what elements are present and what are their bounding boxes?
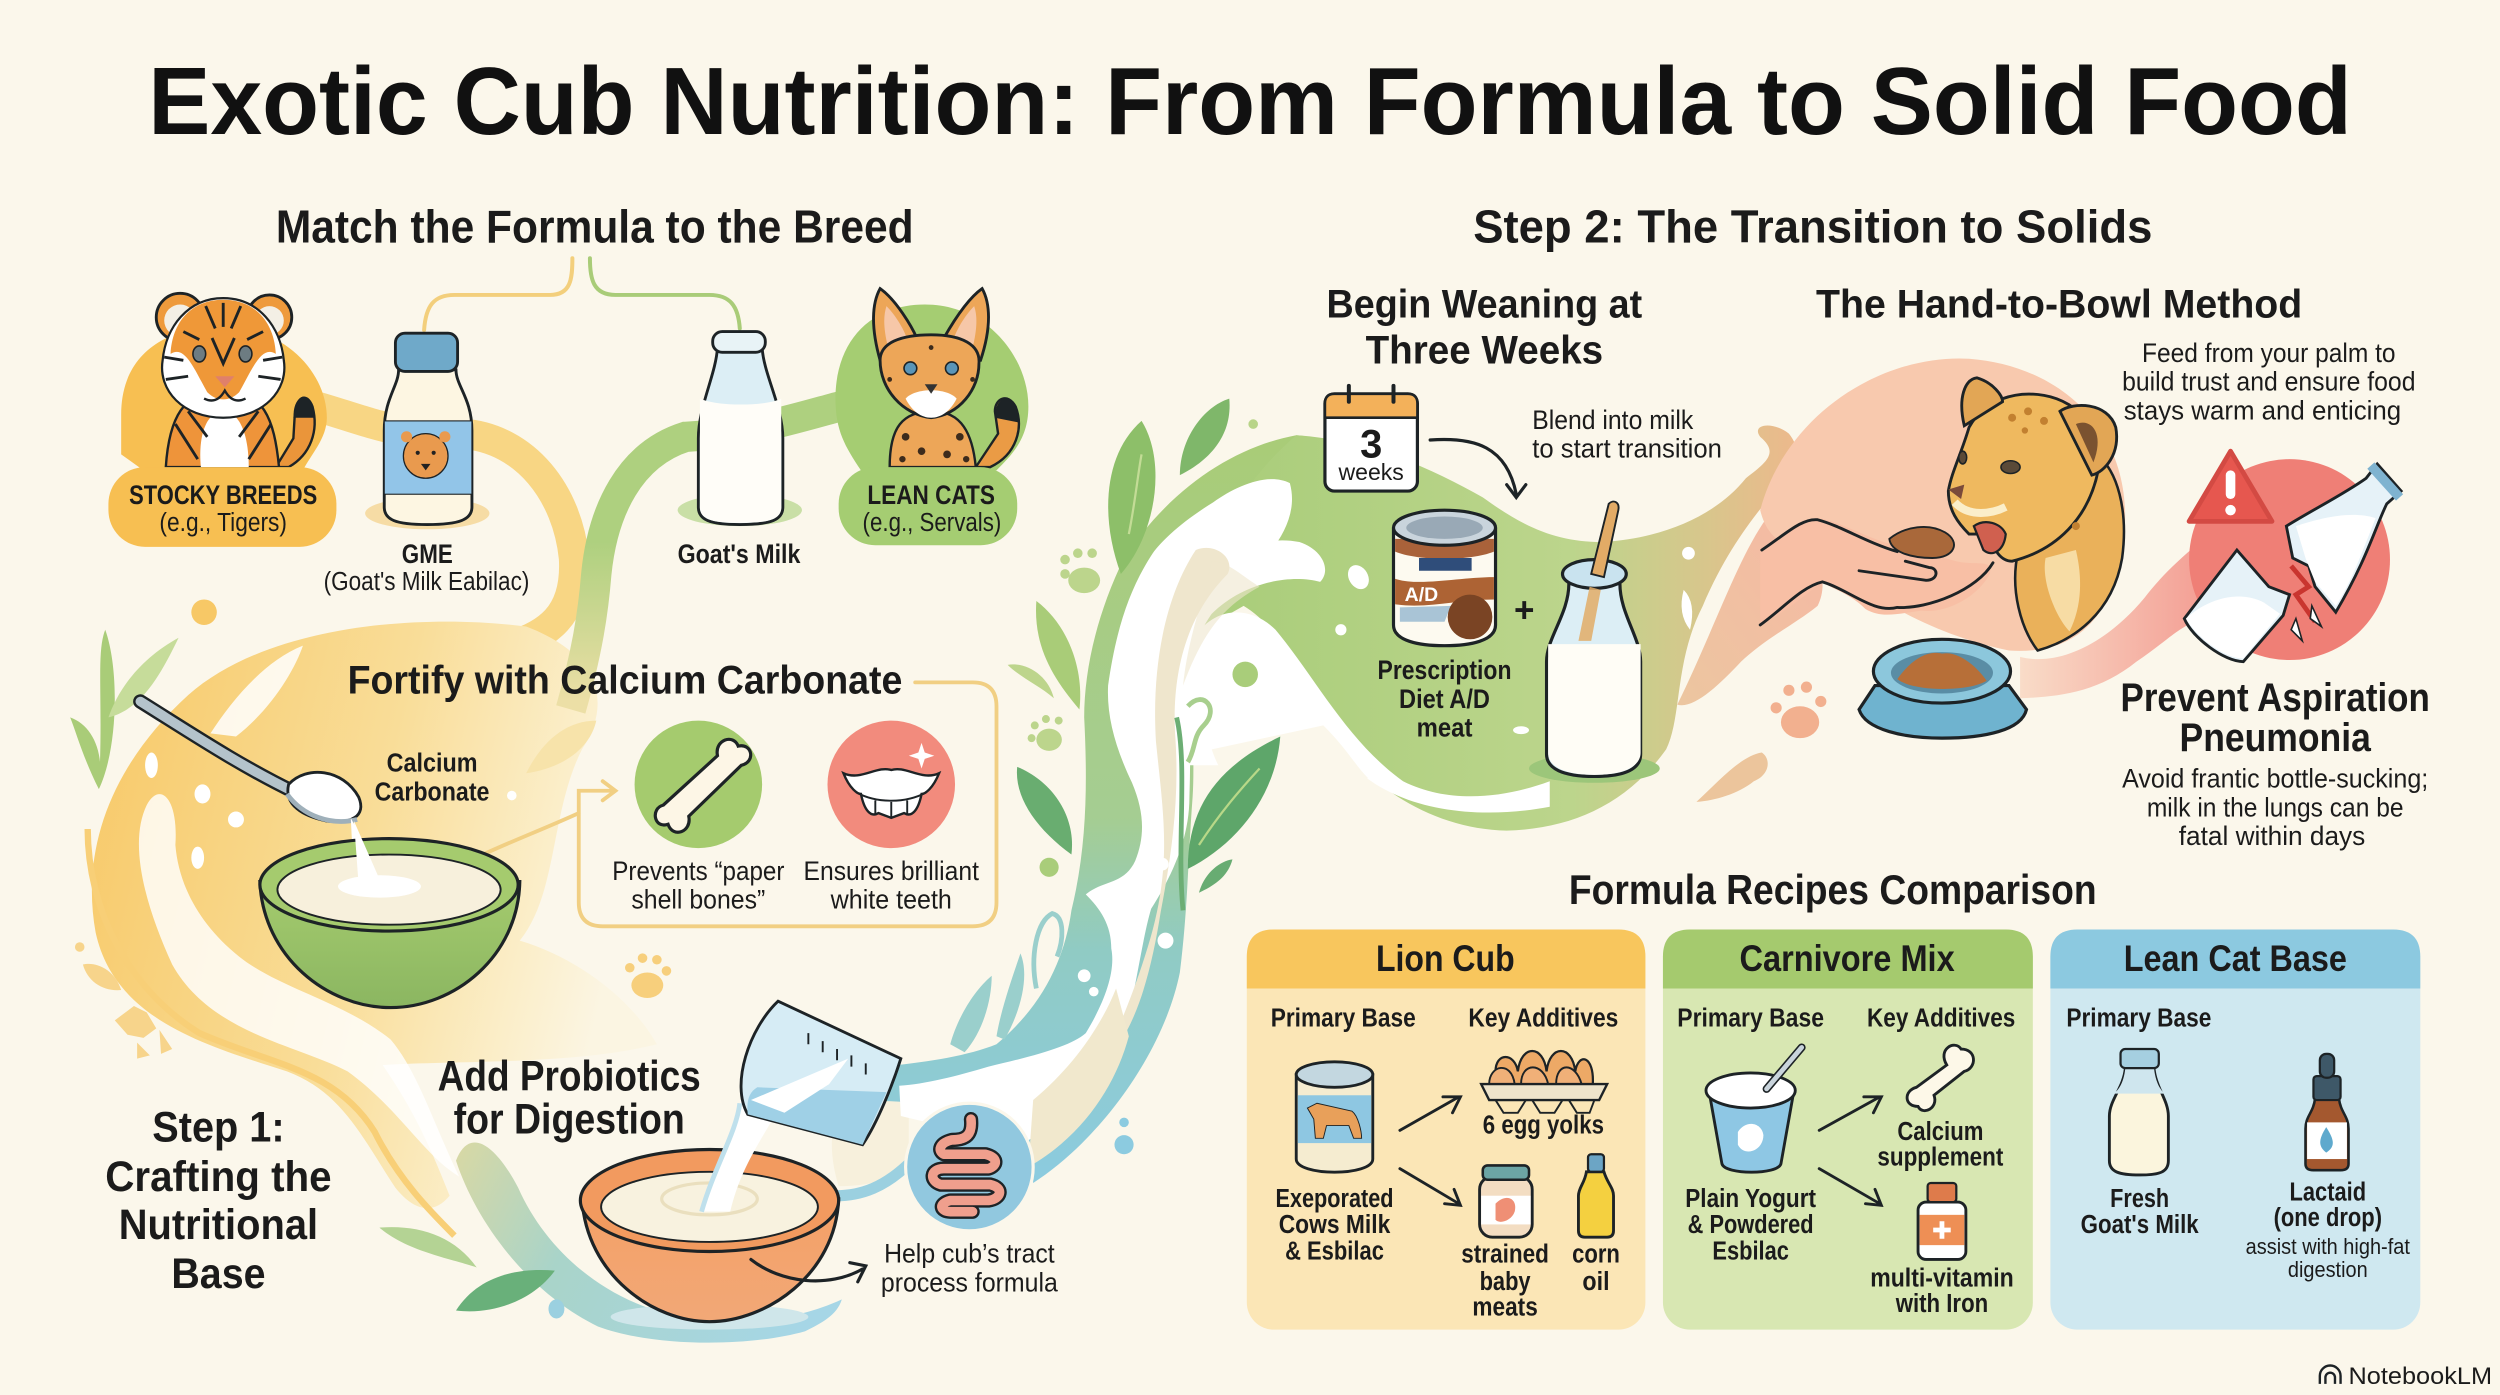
heading: fortify: Fortify with Calcium Carbonate <box>348 659 902 703</box>
panel: lion cub <box>1247 929 1645 1330</box>
flow ribbon: green from lean cats <box>571 405 845 709</box>
icon: blue food bowl <box>1859 639 2026 738</box>
heading: hand to bowl: The Hand-to-Bowl Method <box>1816 282 2302 326</box>
text: lactaid <box>2246 1176 2411 1282</box>
heading: add probiotics: for Digestion <box>454 1096 685 1144</box>
text: white teeth: white teeth <box>830 884 952 915</box>
flow: blue lower ribbon around probiotics bowl <box>456 1142 842 1343</box>
icon: A/D can: A/D <box>1405 585 1438 606</box>
heading: begin weaning <box>1327 282 1642 372</box>
text: paper shell bones: shell bones” <box>631 884 765 915</box>
icon: evaporated milk can <box>1296 1062 1373 1172</box>
panel: peach circle <box>1760 358 2125 651</box>
watermark: NotebookLM: NotebookLM <box>2349 1363 2492 1390</box>
text: avoid frantic <box>2122 763 2428 851</box>
panel: stocky breeds tiger <box>108 293 336 547</box>
text: fresh goat milk: Fresh <box>2110 1183 2169 1213</box>
label: lean cats <box>863 479 1001 537</box>
text: multi-vitamin: multi-vitamin <box>1870 1263 2014 1293</box>
heading: add probiotics: Add Probiotics <box>438 1052 701 1100</box>
panel: carnivore mix <box>1663 929 2033 1330</box>
text: multi-vitamin <box>1870 1263 2014 1318</box>
heading: lean cat base: Lean Cat Base <box>2124 938 2347 979</box>
text: strained meats: baby <box>1480 1266 1531 1296</box>
heading: begin weaning: Begin Weaning at <box>1327 282 1642 326</box>
heading: step 1: Base <box>171 1250 265 1298</box>
text: help cub tract <box>881 1238 1059 1297</box>
text: white teeth <box>804 855 979 915</box>
text: help cub tract: process formula <box>881 1266 1059 1297</box>
icon: serval <box>874 289 1019 467</box>
icon: warning triangle <box>2189 451 2272 521</box>
icon: calendar <box>1325 386 1417 491</box>
panel: lean cat base <box>2050 929 2420 1330</box>
text: blend into milk <box>1532 404 1722 464</box>
leaves at left <box>70 630 179 789</box>
text: calcium supplement <box>1877 1116 2004 1171</box>
label: calcium carbonate <box>375 748 489 806</box>
arrow: bowl to tract <box>751 1259 866 1282</box>
flow: central stream <box>837 435 1359 1183</box>
heading: prevent aspiration <box>2121 676 2430 760</box>
heading: step 2: Step 2: The Transition to Solids <box>1473 200 2152 252</box>
text: evaporated: Exeporated <box>1276 1183 1393 1213</box>
heading: prevent aspiration: Pneumonia <box>2180 716 2372 760</box>
icon: goat milk bottle <box>678 332 802 526</box>
text: yogurt: Esbilac <box>1712 1235 1789 1265</box>
label: calcium carbonate: Carbonate <box>375 776 489 806</box>
text: feed from palm: Feed from your palm to <box>2142 337 2396 368</box>
text: corn oil <box>1572 1239 1620 1296</box>
arrow: to jar <box>1400 1169 1460 1205</box>
icon: yogurt cup <box>1706 1047 1802 1172</box>
heading: step 1: Nutritional <box>119 1201 318 1249</box>
flow: yellow swirl <box>75 599 657 1236</box>
text: GME <box>324 538 529 596</box>
icon: intestine <box>906 1103 1033 1231</box>
panel: red circle <box>2189 459 2390 660</box>
text: paper shell bones <box>612 855 784 915</box>
text: yogurt: Plain Yogurt <box>1685 1183 1816 1213</box>
text: evaporated <box>1276 1183 1393 1265</box>
text: lactaid: digestion <box>2288 1257 2368 1282</box>
leaves along the stream <box>1008 399 1280 893</box>
icon: hand with food <box>1760 518 1993 625</box>
label: stocky breeds: (e.g., Tigers) <box>159 509 287 537</box>
text: feed from palm <box>2122 337 2415 425</box>
label: primary base: Primary Base <box>2066 1003 2211 1033</box>
icon: teeth <box>827 721 955 848</box>
icon: calendar: 3 <box>1360 423 1382 467</box>
text: corn oil: corn <box>1572 1239 1620 1269</box>
text: GME: (Goat's Milk Eabilac) <box>324 568 529 596</box>
text: lactaid: (one drop) <box>2274 1202 2382 1232</box>
text: GME: GME <box>402 538 453 569</box>
label: key additives: Key Additives <box>1867 1003 2015 1033</box>
flow: peach ribbon to hand <box>1677 518 1823 705</box>
text: paper shell bones: Prevents “paper <box>612 855 784 886</box>
text: help cub tract: Help cub’s tract <box>884 1238 1055 1269</box>
text: goat milk: Goat's Milk <box>678 538 801 569</box>
icon: A/D can <box>1393 510 1496 646</box>
text: lactaid: assist with high-fat <box>2246 1234 2411 1259</box>
label: stocky breeds <box>129 479 317 537</box>
text: evaporated: Cows Milk <box>1279 1209 1391 1239</box>
heading: begin weaning: Three Weeks <box>1366 328 1603 372</box>
heading: step 1: Step 1: <box>152 1104 285 1152</box>
text: calcium supplement: supplement <box>1877 1141 2004 1171</box>
heading: add probiotics <box>438 1052 701 1144</box>
arrow: calendar to blend <box>1430 439 1526 497</box>
icon: GME bottle <box>365 333 489 529</box>
label: primary base: Primary Base <box>1677 1003 1824 1033</box>
icon: measuring cup pouring milk <box>702 1001 901 1212</box>
heading: step 1: Crafting the <box>105 1153 332 1201</box>
text: avoid frantic: fatal within days <box>2179 820 2365 851</box>
icon: orange bowl with milk <box>580 1149 839 1330</box>
arrow: to eggs <box>1400 1097 1460 1130</box>
heading: prevent aspiration: Prevent Aspiration <box>2121 676 2430 720</box>
arrow: to bone <box>1819 1097 1881 1130</box>
text: feed from palm: stays warm and enticing <box>2124 394 2401 425</box>
icon: baby food jar <box>1480 1165 1532 1237</box>
text: corn oil: oil <box>1582 1266 1610 1296</box>
icon: vitamin bottle <box>1918 1183 1966 1259</box>
text: strained meats: strained <box>1461 1239 1549 1269</box>
text: avoid frantic: Avoid frantic bottle-sucking; <box>2122 763 2428 794</box>
label: primary base: Primary Base <box>1271 1003 1416 1033</box>
text: yogurt <box>1685 1183 1816 1265</box>
text: prescription: Prescription <box>1378 654 1511 685</box>
text: lactaid: Lactaid <box>2290 1176 2366 1206</box>
flow: milk ribbons <box>899 419 1695 1167</box>
text: yogurt: & Powdered <box>1688 1209 1814 1239</box>
label: calcium carbonate: Calcium <box>387 748 478 778</box>
icon: green bowl <box>260 821 520 1008</box>
icon: lactaid dropper <box>2305 1054 2349 1170</box>
icon: calendar: weeks <box>1337 459 1404 485</box>
text: fresh goat milk: Goat's Milk <box>2081 1209 2199 1239</box>
heading: step 1 <box>105 1104 332 1298</box>
icon: lion cub <box>1948 378 2124 650</box>
icon: milk bottle with stirrer <box>1529 502 1660 783</box>
panel: calcium benefits frame <box>435 682 996 926</box>
flow ribbon: yellow from stocky breeds <box>311 405 574 650</box>
panel: lean cats serval <box>835 289 1028 545</box>
text: prescription: meat <box>1417 712 1472 743</box>
title: Exotic Cub Nutrition: From Formula to Solid Food <box>148 48 2352 155</box>
text: calcium supplement: Calcium <box>1897 1116 1983 1146</box>
heading: match the formula: Match the Formula to the Breed <box>276 200 914 252</box>
flow: tan droplet tail <box>1696 753 1768 802</box>
text: fresh goat milk <box>2081 1183 2199 1239</box>
flow: green transition wave <box>1188 426 1797 831</box>
heading: carnivore mix: Carnivore Mix <box>1739 938 1955 979</box>
text: strained meats: meats <box>1472 1291 1538 1321</box>
connector: formula branches <box>424 258 740 330</box>
text: blend into milk: to start transition <box>1532 433 1722 464</box>
text: feed from palm: build trust and ensure food <box>2122 366 2415 397</box>
icon: fresh milk bottle <box>2109 1049 2168 1175</box>
arrow: to vitamin <box>1819 1169 1881 1205</box>
text: strained meats <box>1461 1239 1549 1321</box>
label: lean cats: LEAN CATS <box>867 479 995 510</box>
paws <box>625 548 1826 998</box>
icon: plus: + <box>1514 591 1534 630</box>
icon: broken bottle <box>2184 464 2401 662</box>
leaves at bottom <box>379 1227 564 1318</box>
heading: recipes comparison: Formula Recipes Comparison <box>1569 866 2097 913</box>
text: prescription: Diet A/D <box>1399 683 1490 714</box>
text: prescription <box>1378 654 1511 743</box>
text: egg yolks: 6 egg yolks <box>1483 1110 1604 1140</box>
text: evaporated: & Esbilac <box>1285 1235 1384 1265</box>
icon: calcium bone <box>1907 1045 1973 1111</box>
icon: bone <box>635 721 762 848</box>
icon: tiger <box>156 293 315 467</box>
text: white teeth: Ensures brilliant <box>804 855 979 886</box>
icon: eggs carton <box>1481 1051 1607 1113</box>
icon: spoon with powder <box>140 701 383 880</box>
flow: pink ribbon to warning <box>2020 518 2248 698</box>
flow: stream to bowl band <box>832 1091 912 1196</box>
text: multi-vitamin: with Iron <box>1895 1288 1988 1318</box>
icon: corn oil bottle <box>1578 1154 1614 1237</box>
label: key additives: Key Additives <box>1468 1003 1618 1033</box>
label: stocky breeds: STOCKY BREEDS <box>129 479 317 510</box>
text: avoid frantic: milk in the lungs can be <box>2147 791 2404 822</box>
text: blend into milk: Blend into milk <box>1532 404 1694 435</box>
label: lean cats: (e.g., Servals) <box>863 509 1001 537</box>
heading: lion cub: Lion Cub <box>1376 938 1515 979</box>
